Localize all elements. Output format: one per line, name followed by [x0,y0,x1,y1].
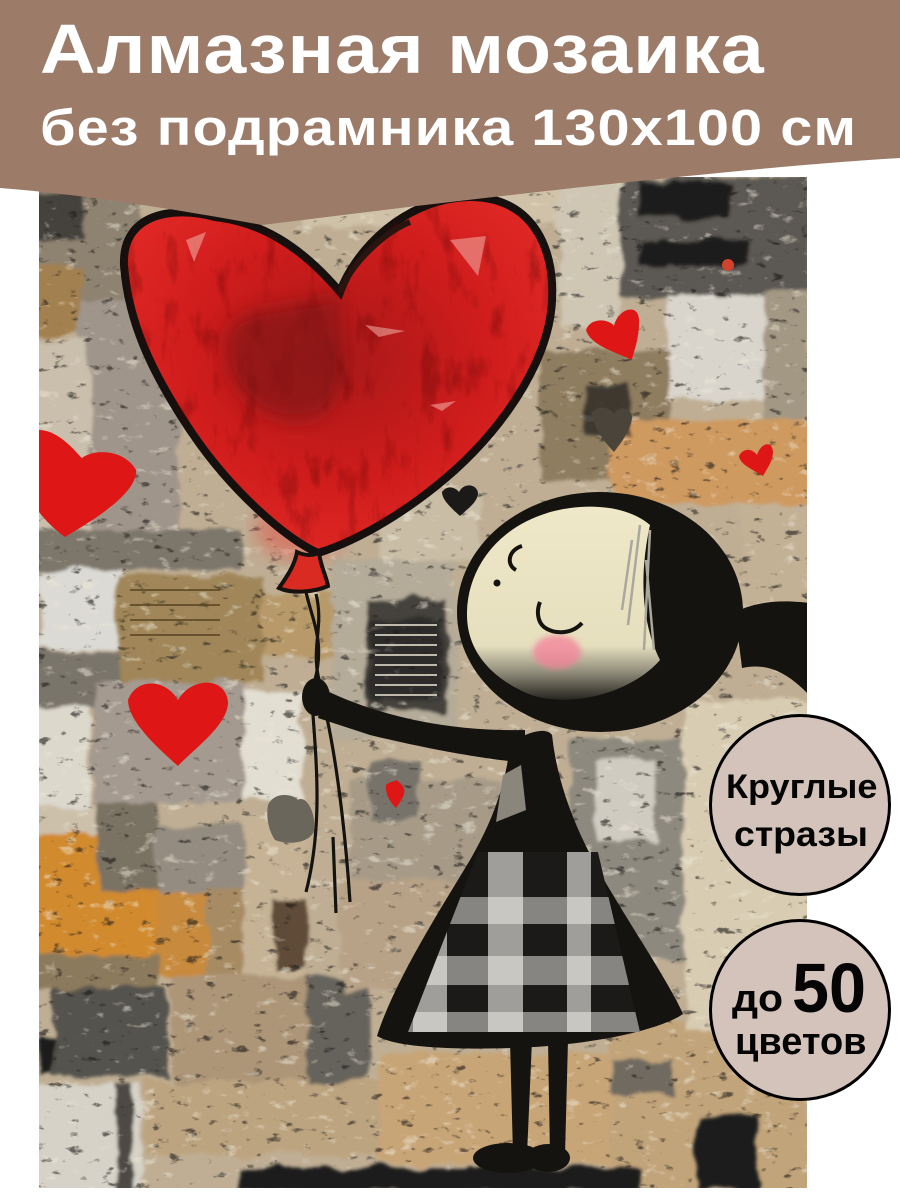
girl: head and hair [457,492,743,732]
girl: face [467,507,660,700]
balloon heart [120,195,555,592]
balloon strings [306,592,350,913]
dark marks [40,182,757,1192]
badge: up to 50 colours: цветов [735,1021,867,1063]
title: Алмазная мозаика [40,10,765,88]
subtitle: без подрамника 130х100 см [40,99,857,156]
balloon glow [255,500,345,560]
badge: up to 50 colours: до [732,978,783,1020]
small dark hearts [442,485,478,516]
girl: dress [377,731,683,1049]
header band [0,0,900,225]
girl: legs [473,1040,570,1173]
badge: up to 50 colours: 50 [792,949,866,1027]
badge: round rhinestones: Круглые [726,768,877,806]
girl: arm and hand [302,678,525,762]
newsprint speckle [39,177,807,1188]
badge: round rhinestones: стразы [734,815,868,854]
small hearts [39,310,773,808]
badge: round rhinestones [709,714,891,896]
girl: ponytail [738,601,807,693]
badge: up to 50 colours [709,919,891,1101]
